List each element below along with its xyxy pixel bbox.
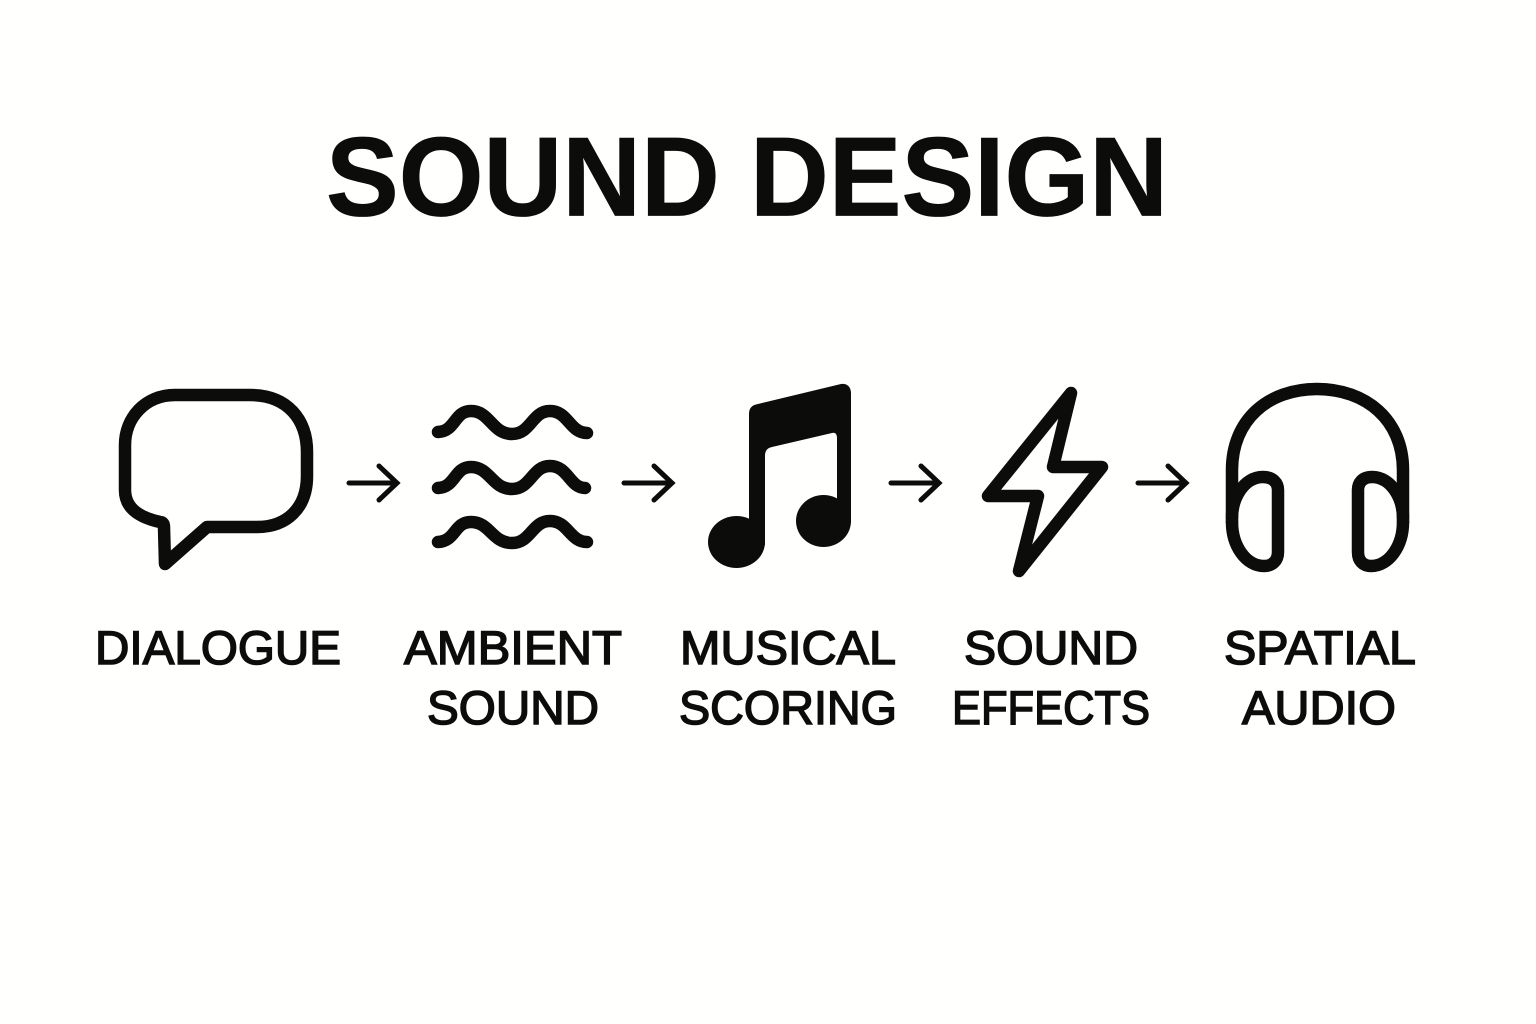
label: dialogue: DIALOGUE: [95, 621, 341, 674]
label: ambient sound: [404, 621, 622, 734]
arrow: ambient to musical: [624, 466, 672, 500]
label: sound effects: EFFECTS: [952, 681, 1150, 734]
icon: waves: [438, 411, 587, 543]
label: musical scoring: SCORING: [679, 681, 897, 734]
icon: speech bubble: [125, 395, 307, 564]
arrow: dialogue to ambient: [349, 466, 397, 500]
label: spatial audio: [1224, 621, 1416, 734]
label: musical scoring: [679, 621, 897, 734]
title: SOUND DESIGN: [326, 114, 1168, 240]
icon: music note: [708, 384, 851, 568]
arrow: musical to effects: [891, 466, 939, 500]
icon: lightning bolt: [988, 393, 1102, 571]
label: sound effects: SOUND: [964, 621, 1138, 674]
label: musical scoring: MUSICAL: [680, 621, 896, 674]
arrow: effects to spatial: [1138, 466, 1186, 500]
label: sound effects: [952, 621, 1150, 734]
label: ambient sound: SOUND: [427, 681, 599, 734]
icon: headphones: [1232, 389, 1403, 566]
label: spatial audio: SPATIAL: [1224, 621, 1416, 674]
label: spatial audio: AUDIO: [1242, 681, 1396, 734]
label: ambient sound: AMBIENT: [404, 621, 622, 674]
